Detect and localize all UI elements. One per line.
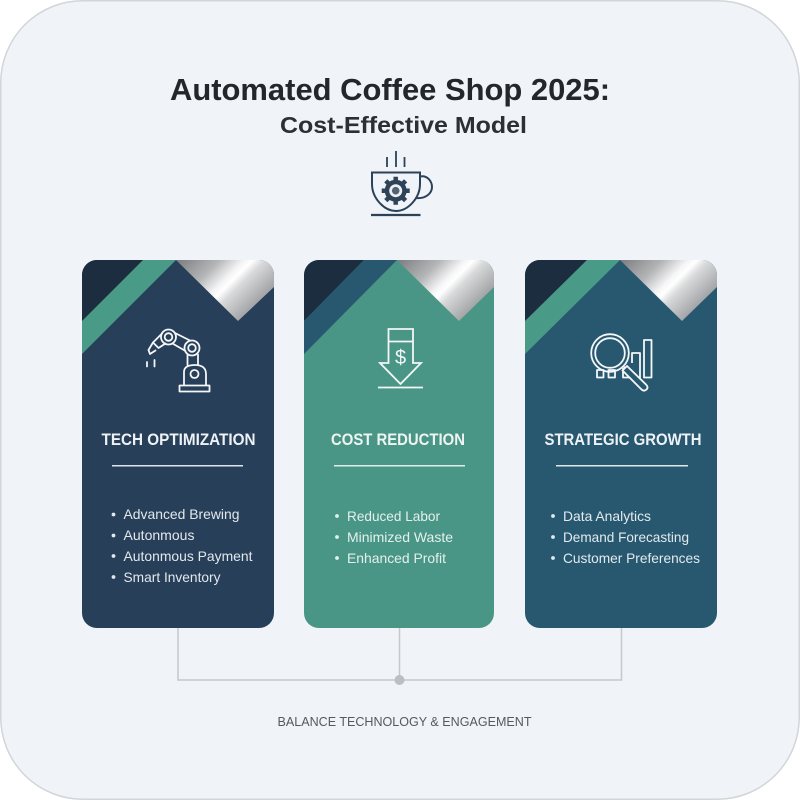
list: tech items: Autonmous [124, 527, 194, 543]
list: tech items: Autonmous Payment [124, 548, 253, 564]
list: tech items [112, 506, 253, 585]
icon: dollar down arrow [378, 329, 423, 388]
panel: cost reduction [304, 260, 494, 628]
list: cost items [335, 508, 453, 566]
icon: coffee cup with gear [371, 151, 432, 215]
panel: tech optimization [82, 260, 274, 628]
icon: magnifier over bar chart [591, 334, 652, 391]
list: tech items: Smart Inventory [124, 569, 220, 585]
list: cost items: Enhanced Profit [347, 550, 446, 566]
list: growth items [551, 508, 700, 566]
icon: robot arm [147, 330, 210, 392]
list: growth items: Demand Forecasting [563, 529, 689, 545]
list: growth items: Customer Preferences [563, 550, 700, 566]
footer caption: BALANCE TECHNOLOGY & ENGAGEMENT [278, 714, 532, 729]
heading: strategic growth: STRATEGIC GROWTH [544, 431, 702, 449]
heading: cost reduction: COST REDUCTION [331, 431, 465, 449]
connector lines [178, 628, 622, 685]
list: cost items: Minimized Waste [347, 529, 453, 545]
list: growth items: Data Analytics [563, 508, 651, 524]
corner accent: dark, teal and silver [82, 260, 274, 354]
corner accent: dark, blue and silver [304, 260, 494, 354]
list: tech items: Advanced Brewing [124, 506, 240, 522]
corner accent: dark, teal and silver [525, 260, 717, 354]
panel: strategic growth [525, 260, 717, 628]
subtitle: Cost-Effective Model [280, 112, 527, 138]
list: cost items: Reduced Labor [347, 508, 440, 524]
heading: tech optimization: TECH OPTIMIZATION [102, 431, 256, 449]
dollar sign: $ [395, 347, 406, 369]
title: Automated Coffee Shop 2025: [170, 72, 610, 107]
